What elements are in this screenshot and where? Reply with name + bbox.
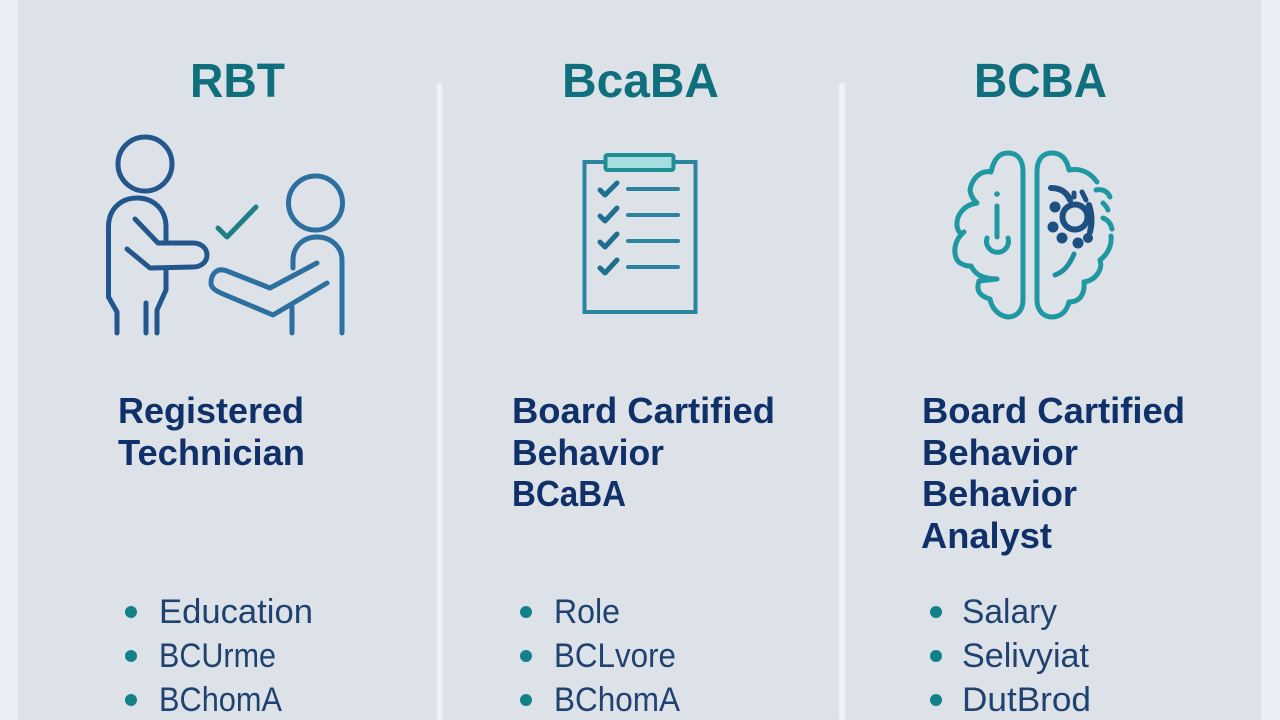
column: BCaBA: [512, 55, 775, 719]
list: RBT items: Education: [159, 593, 313, 631]
role title: Board Certified Behavior Behavior Analyst: Behavior: [922, 473, 1077, 514]
role title: Board Certified Behavior BCaBA: BCaBA: [512, 473, 626, 514]
list: BCaBA items: BCLvore: [554, 637, 676, 675]
column: BCBA: [921, 55, 1185, 719]
role title: Board Certified Behavior BCaBA: Board Cartified: [512, 390, 775, 431]
list: BCBA items: Salary: [962, 593, 1057, 631]
list: RBT items: BCUrme: [159, 637, 276, 675]
list: RBT items: [125, 593, 313, 719]
column divider right: [839, 83, 845, 720]
column divider left: [437, 83, 442, 720]
list: BCBA items: [930, 593, 1091, 719]
list: BCaBA items: [520, 593, 680, 719]
role title: Board Certified Behavior BCaBA: Behavior: [512, 432, 664, 473]
heading: BCBA: BCBA: [974, 55, 1107, 108]
role title: Board Certified Behavior Behavior Analyst: [921, 390, 1185, 556]
icon: brain with thermometer and gear: [955, 153, 1112, 317]
role title: Board Certified Behavior BCaBA: [512, 390, 775, 514]
role title: Board Certified Behavior Behavior Analyst: Board Cartified: [922, 390, 1185, 431]
gear: [1050, 188, 1091, 246]
role title: Registered Technician: [118, 390, 305, 473]
list: BCaBA items: Role: [554, 593, 620, 631]
heading: RBT: RBT: [190, 55, 285, 108]
role title: Board Certified Behavior Behavior Analyst: Analyst: [921, 515, 1052, 556]
list: BCBA items: DutBrod: [962, 681, 1091, 719]
icon: clipboard checklist: [584, 155, 696, 312]
list: BCBA items: Selivyiat: [962, 637, 1090, 675]
list: BCaBA items: BChomA: [554, 681, 680, 719]
role title: Registered Technician: Technician: [118, 432, 305, 473]
icon: technician and client handshake with checkmark: [108, 137, 342, 333]
role title: Registered Technician: Registered: [118, 390, 304, 431]
role title: Board Certified Behavior Behavior Analyst: Behavior: [922, 432, 1078, 473]
column: RBT: [108, 55, 342, 719]
list: RBT items: BChomA: [159, 681, 282, 719]
heading: BCaBA: BcaBA: [562, 55, 719, 108]
